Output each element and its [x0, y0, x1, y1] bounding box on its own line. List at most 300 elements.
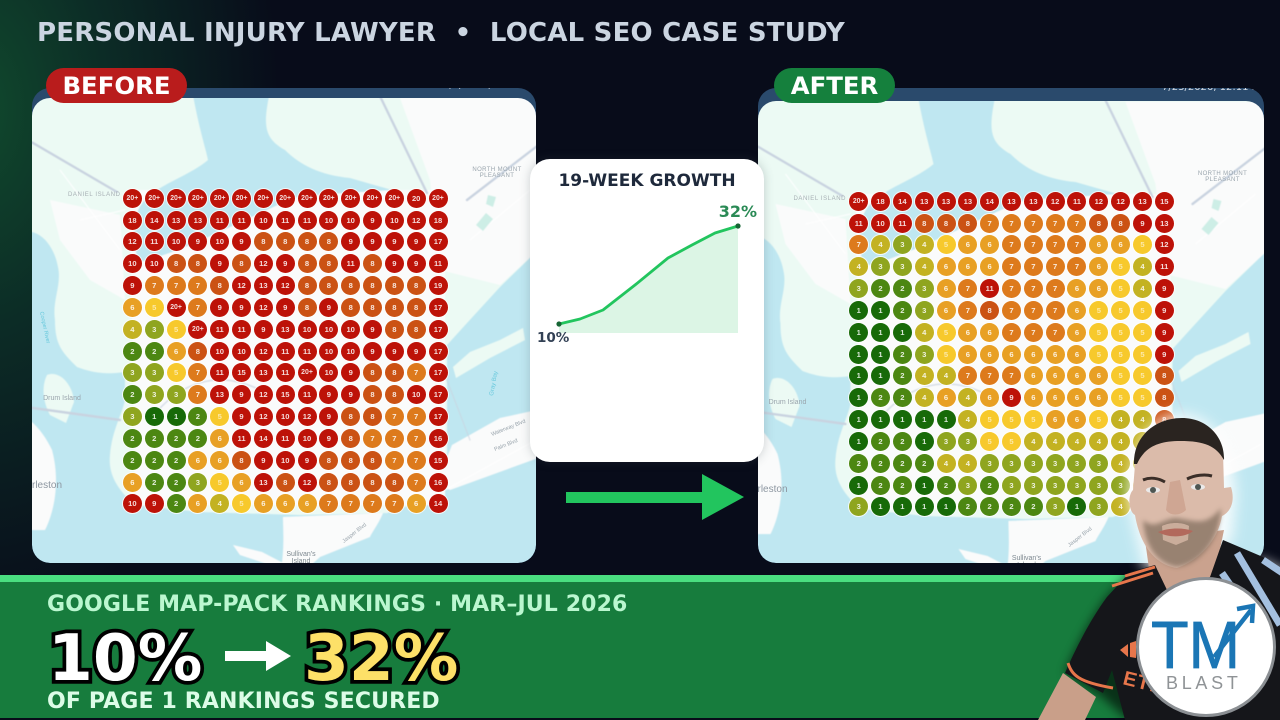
- ranking grid: before: 5: [174, 368, 178, 377]
- map: after: Drum Island: [769, 399, 806, 406]
- ranking grid: after: 5: [1097, 328, 1101, 337]
- ranking grid: before: 10: [259, 216, 268, 225]
- ranking grid: before: 9: [370, 216, 375, 225]
- ranking grid: after: 5: [1009, 437, 1014, 446]
- ranking grid: after: 8: [1162, 393, 1166, 402]
- ranking grid: after: 2: [900, 459, 904, 468]
- ranking grid: after: 4: [857, 262, 861, 271]
- ranking grid: after: 5: [1119, 350, 1123, 359]
- ranking grid: before: 5: [218, 478, 222, 487]
- ranking grid: before: 20+: [323, 195, 335, 202]
- ranking grid: after: 11: [986, 284, 994, 293]
- ranking grid: after: 2: [878, 393, 883, 402]
- ranking grid: before: 8: [283, 237, 287, 246]
- ranking grid: before: 7: [414, 368, 418, 377]
- ranking grid: before: 7: [414, 412, 418, 421]
- ranking grid: after: 7: [966, 371, 970, 380]
- ranking grid: before: 20+: [367, 195, 378, 202]
- ranking grid: before: 12: [303, 478, 311, 487]
- ranking grid: before: 5: [218, 412, 222, 421]
- ranking grid: after: 7: [988, 371, 992, 380]
- ranking grid: after: [848, 191, 1175, 517]
- ranking grid: after: 4: [944, 371, 948, 380]
- ranking grid: before: 20+: [279, 195, 291, 202]
- ranking grid: after: 4: [1140, 502, 1145, 511]
- ranking grid: before: 12: [259, 390, 268, 399]
- ranking grid: after: 2: [900, 350, 904, 359]
- ranking grid: before: 17: [434, 412, 442, 421]
- ranking grid: before: 8: [414, 281, 418, 290]
- ranking grid: before: 20+: [170, 195, 182, 202]
- ranking grid: before: 2: [196, 412, 200, 421]
- ranking grid: after: 7: [1162, 437, 1166, 446]
- ranking grid: after: 2: [878, 284, 883, 293]
- ranking grid: after: 6: [1031, 371, 1035, 380]
- ranking grid: after: 7: [1053, 219, 1057, 228]
- ranking grid: before: 15: [434, 456, 442, 465]
- ranking grid: before: 8: [305, 259, 309, 268]
- ranking grid: before: 13: [281, 325, 289, 334]
- ranking grid: before: 10: [215, 237, 224, 246]
- ranking grid: before: 11: [303, 347, 311, 356]
- ranking grid: after: 8: [1162, 371, 1166, 380]
- map: before: PLEASANT: [480, 173, 514, 179]
- ranking grid: after: 6: [1162, 502, 1166, 511]
- ranking grid: after: 3: [944, 437, 948, 446]
- ranking grid: after: 6: [1053, 350, 1057, 359]
- ranking grid: after: 1: [878, 350, 883, 359]
- ranking grid: before: 9: [370, 237, 375, 246]
- title: PERSONAL INJURY LAWYER • LOCAL SEO CASE STUDY: [37, 18, 845, 48]
- ranking grid: before: 20: [412, 194, 420, 203]
- ranking grid: after: 1: [857, 306, 861, 315]
- ranking grid: after: 6: [988, 240, 992, 249]
- ranking grid: after: 3: [1097, 459, 1101, 468]
- ranking grid: before: 8: [305, 237, 309, 246]
- ranking grid: after: 3: [878, 262, 883, 271]
- ranking grid: before: 10: [128, 499, 137, 508]
- ranking grid: after: 7: [988, 219, 992, 228]
- map: before: DANIEL ISLAND: [68, 192, 121, 198]
- ranking grid: before: 11: [281, 434, 289, 443]
- ranking grid: before: 12: [259, 347, 268, 356]
- ranking grid: after: 1: [922, 481, 926, 490]
- ranking grid: before: 8: [349, 478, 353, 487]
- ranking grid: after: 6: [1053, 415, 1057, 424]
- ranking grid: after: 6: [1075, 350, 1079, 359]
- ranking grid: after: 12: [1095, 197, 1103, 206]
- ranking grid: before: 3: [152, 368, 156, 377]
- ranking grid: after: 14: [898, 197, 907, 206]
- line chart: 32%: [719, 202, 757, 221]
- ranking grid: before: [122, 188, 449, 514]
- ranking grid: before: 11: [303, 216, 311, 225]
- ranking grid: after: 7: [1075, 219, 1079, 228]
- ranking grid: before: 9: [392, 259, 396, 268]
- panel: growth chart card: [530, 159, 764, 462]
- ranking grid: before: 14: [434, 499, 442, 508]
- ranking grid: before: 6: [305, 499, 309, 508]
- ranking grid: before: 8: [305, 281, 309, 290]
- ranking grid: after: 1: [857, 393, 861, 402]
- ranking grid: after: 13: [1160, 219, 1169, 228]
- map: before: Sullivan's: [286, 551, 316, 558]
- ranking grid: after: 1: [922, 502, 926, 511]
- ranking grid: before: 8: [392, 325, 396, 334]
- ranking grid: before: 9: [327, 412, 331, 421]
- ranking grid: after: 1: [878, 371, 883, 380]
- ranking grid: before: 8: [349, 303, 353, 312]
- ranking grid: before: 7: [414, 434, 418, 443]
- ranking grid: before: 8: [327, 259, 331, 268]
- ranking grid: before: 2: [130, 347, 135, 356]
- ranking grid: before: 12: [303, 412, 311, 421]
- ranking grid: before: 9: [370, 325, 375, 334]
- ranking grid: before: 8: [218, 281, 222, 290]
- ranking grid: after: 6: [966, 328, 970, 337]
- ranking grid: after: 1: [857, 350, 861, 359]
- ranking grid: before: 9: [218, 303, 222, 312]
- ranking grid: after: 7: [1009, 262, 1014, 271]
- banner caption: OF PAGE 1 RANKINGS SECURED: [47, 689, 440, 714]
- map: before: Waterway Blvd: [491, 419, 527, 438]
- ranking grid: after: 1: [900, 415, 904, 424]
- ranking grid: after: 2: [878, 459, 883, 468]
- ranking grid: after: 5: [1031, 415, 1035, 424]
- ranking grid: after: 5: [1119, 306, 1123, 315]
- ranking grid: after: 5: [944, 240, 948, 249]
- ranking grid: before: 4: [218, 499, 222, 508]
- ranking grid: before: 11: [281, 347, 289, 356]
- ranking grid: after: 8: [944, 219, 948, 228]
- ranking grid: after: 3: [900, 240, 904, 249]
- ranking grid: after: 3: [1053, 502, 1057, 511]
- ranking grid: after: 7: [1009, 306, 1014, 315]
- arrow: before to after: [566, 474, 744, 520]
- ranking grid: after: 7: [1053, 262, 1057, 271]
- ranking grid: after: 5: [1140, 371, 1145, 380]
- ranking grid: before: 9: [392, 347, 396, 356]
- ranking grid: after: 7: [1075, 240, 1079, 249]
- ranking grid: before: 9: [130, 281, 135, 290]
- ranking grid: after: 3: [922, 284, 926, 293]
- ranking grid: before: 9: [261, 325, 265, 334]
- ranking grid: before: 7: [152, 281, 156, 290]
- ranking grid: after: 9: [1162, 284, 1166, 293]
- ranking grid: before: 8: [349, 412, 353, 421]
- ranking grid: after: 2: [988, 502, 992, 511]
- ranking grid: before: 20+: [388, 195, 400, 202]
- ranking grid: after: 6: [988, 328, 992, 337]
- ranking grid: after: 4: [1075, 437, 1079, 446]
- ranking grid: after: 2: [900, 393, 904, 402]
- ranking grid: after: 8: [1097, 219, 1101, 228]
- ranking grid: before: 20+: [258, 195, 269, 202]
- ranking grid: before: 12: [259, 412, 268, 421]
- ranking grid: after: 5: [1119, 328, 1123, 337]
- ranking grid: before: 9: [327, 390, 331, 399]
- ranking grid: after: 6: [944, 262, 948, 271]
- ranking grid: after: 3: [1075, 459, 1079, 468]
- ranking grid: before: 6: [218, 434, 222, 443]
- ranking grid: before: 9: [370, 347, 375, 356]
- ranking grid: before: 8: [370, 259, 375, 268]
- ranking grid: before: 8: [414, 325, 418, 334]
- ranking grid: after: 13: [942, 197, 950, 206]
- ranking grid: after: 2: [900, 481, 904, 490]
- stat: 32% end value: 32%: [304, 621, 458, 696]
- ranking grid: after: 6: [1075, 284, 1079, 293]
- ranking grid: before: 7: [196, 281, 200, 290]
- ranking grid: before: 8: [370, 368, 375, 377]
- ranking grid: before: 1: [174, 412, 178, 421]
- ranking grid: after: 1: [857, 437, 861, 446]
- ranking grid: before: 11: [216, 325, 224, 334]
- ranking grid: before: 7: [414, 478, 418, 487]
- ranking grid: after: 7: [1075, 262, 1079, 271]
- ranking grid: before: 11: [238, 216, 246, 225]
- ranking grid: before: 7: [392, 456, 396, 465]
- ranking grid: after: 7: [1031, 328, 1035, 337]
- ranking grid: before: 7: [392, 434, 396, 443]
- ranking grid: after: 9: [1162, 328, 1166, 337]
- ranking grid: after: 7: [1162, 459, 1166, 468]
- ranking grid: before: 2: [174, 478, 178, 487]
- ranking grid: before: 5: [174, 325, 178, 334]
- ranking grid: before: 20+: [301, 369, 313, 376]
- ranking grid: before: 8: [370, 390, 375, 399]
- ranking grid: before: 3: [130, 412, 135, 421]
- ranking grid: before: 9: [239, 412, 244, 421]
- ranking grid: before: 10: [325, 347, 333, 356]
- ranking grid: after: 2: [966, 502, 970, 511]
- ranking grid: before: 8: [370, 478, 375, 487]
- ranking grid: after: 3: [1009, 481, 1014, 490]
- ranking grid: after: 5: [1119, 371, 1123, 380]
- ranking grid: before: 9: [327, 303, 331, 312]
- ranking grid: after: 6: [1075, 393, 1079, 402]
- ranking grid: before: 5: [152, 303, 156, 312]
- ranking grid: after: 1: [900, 502, 904, 511]
- ranking grid: before: 15: [281, 390, 289, 399]
- ranking grid: after: 4: [966, 459, 970, 468]
- ranking grid: after: 5: [1140, 350, 1145, 359]
- ranking grid: after: 4: [1140, 459, 1145, 468]
- ranking grid: before: 11: [347, 259, 355, 268]
- ranking grid: before: 11: [303, 390, 311, 399]
- ranking grid: after: 2: [900, 306, 904, 315]
- ranking grid: before: 10: [281, 412, 289, 421]
- ranking grid: before: 8: [196, 347, 200, 356]
- ranking grid: before: 14: [150, 216, 158, 225]
- ranking grid: after: 3: [1031, 459, 1035, 468]
- ranking grid: before: 10: [303, 434, 311, 443]
- ranking grid: after: 4: [922, 240, 926, 249]
- ranking grid: after: 4: [1140, 284, 1145, 293]
- ranking grid: before: 11: [434, 259, 442, 268]
- map: after: Jasper Blvd: [1067, 526, 1093, 549]
- ranking grid: after: 1: [878, 306, 883, 315]
- ranking grid: before: 10: [150, 259, 158, 268]
- ranking grid: after: 6: [1053, 371, 1057, 380]
- ranking grid: after: 4: [922, 393, 926, 402]
- badge: after: AFTER: [791, 71, 878, 100]
- ranking grid: before: 9: [414, 237, 418, 246]
- ranking grid: before: 10: [346, 347, 355, 356]
- ranking grid: before: 16: [434, 478, 442, 487]
- ranking grid: before: 7: [370, 434, 375, 443]
- ranking grid: before: 2: [130, 390, 135, 399]
- arrow: stat arrow: [225, 641, 291, 671]
- ranking grid: before: 9: [283, 259, 287, 268]
- map: before: Cooper River: [38, 311, 51, 344]
- ranking grid: after: 13: [920, 197, 928, 206]
- chart heading: 19-WEEK GROWTH: [558, 171, 736, 191]
- ranking grid: after: 3: [1097, 502, 1101, 511]
- ranking grid: after: 7: [1009, 284, 1014, 293]
- ranking grid: before: 10: [390, 216, 399, 225]
- ranking grid: before: 8: [414, 303, 418, 312]
- ranking grid: before: 7: [414, 456, 418, 465]
- ranking grid: before: 17: [434, 347, 442, 356]
- ranking grid: before: 5: [239, 499, 244, 508]
- ranking grid: before: 13: [194, 216, 202, 225]
- ranking grid: before: 8: [349, 434, 353, 443]
- ranking grid: before: 20+: [432, 195, 444, 202]
- ranking grid: after: 6: [944, 306, 948, 315]
- ranking grid: after: 6: [1009, 350, 1014, 359]
- ranking grid: before: 6: [218, 456, 222, 465]
- ranking grid: after: 5: [1140, 306, 1145, 315]
- ranking grid: before: 10: [237, 347, 246, 356]
- ranking grid: before: 8: [392, 390, 396, 399]
- ranking grid: before: 7: [370, 499, 375, 508]
- badge: before: [46, 68, 187, 103]
- ranking grid: after: 1: [857, 328, 861, 337]
- ranking grid: before: 20+: [236, 195, 247, 202]
- ranking grid: after: 13: [1138, 197, 1147, 206]
- line chart: 10%: [537, 330, 570, 346]
- ranking grid: before: 12: [412, 216, 420, 225]
- ranking grid: after: 7: [1031, 240, 1035, 249]
- ranking grid: after: 7: [1009, 328, 1014, 337]
- ranking grid: before: 9: [349, 237, 353, 246]
- ranking grid: after: 5: [1119, 262, 1123, 271]
- ranking grid: before: 17: [434, 390, 442, 399]
- ranking grid: before: 7: [392, 499, 396, 508]
- ranking grid: before: 9: [239, 237, 244, 246]
- ranking grid: before: 8: [392, 368, 396, 377]
- ranking grid: before: 7: [349, 499, 353, 508]
- ranking grid: after: 7: [1031, 262, 1035, 271]
- ranking grid: before: 2: [152, 434, 156, 443]
- ranking grid: after: 2: [878, 481, 883, 490]
- ranking grid: after: 3: [1053, 459, 1057, 468]
- ranking grid: after: 7: [857, 240, 861, 249]
- ranking grid: before: 9: [283, 303, 287, 312]
- ranking grid: after: 11: [898, 219, 906, 228]
- ranking grid: before: 20+: [192, 326, 204, 333]
- ranking grid: after: 14: [985, 197, 994, 206]
- ranking grid: before: 10: [325, 325, 333, 334]
- ranking grid: before: 9: [239, 390, 244, 399]
- map: after: NORTH MOUNT: [1198, 171, 1247, 177]
- panel: before map: [32, 88, 536, 563]
- ranking grid: before: 7: [196, 303, 200, 312]
- ranking grid: after: 4: [1053, 437, 1057, 446]
- ranking grid: after: 7: [966, 306, 970, 315]
- ranking grid: before: 12: [128, 237, 137, 246]
- ranking grid: before: 8: [370, 456, 375, 465]
- ranking grid: before: 18: [434, 216, 442, 225]
- ranking grid: after: 4: [1119, 459, 1123, 468]
- map: before: Drum Island: [43, 395, 81, 402]
- logo: TM Blast: TM: [1151, 608, 1240, 683]
- panel: after map: [758, 88, 1264, 563]
- ranking grid: after: 2: [988, 481, 992, 490]
- ranking grid: after: 1: [1075, 502, 1079, 511]
- ranking grid: after: 6: [1075, 328, 1079, 337]
- ranking grid: before: 18: [128, 216, 137, 225]
- ranking grid: before: 12: [259, 259, 268, 268]
- ranking grid: before: 2: [174, 456, 178, 465]
- ranking grid: after: 18: [876, 197, 885, 206]
- map: before: [32, 98, 536, 563]
- ranking grid: after: 4: [1119, 415, 1123, 424]
- ranking grid: after: 1: [922, 415, 926, 424]
- ranking grid: after: 5: [1119, 284, 1123, 293]
- ranking grid: before: 2: [174, 499, 178, 508]
- ranking grid: after: 4: [1031, 437, 1035, 446]
- map: after: DANIEL ISLAND: [794, 196, 846, 202]
- ranking grid: before: 10: [325, 368, 333, 377]
- ranking grid: after: 2: [1009, 502, 1014, 511]
- ranking grid: before: 20+: [345, 195, 357, 202]
- ranking grid: before: 6: [239, 478, 244, 487]
- ranking grid: before: 10: [215, 347, 224, 356]
- ranking grid: after: 7: [1053, 306, 1057, 315]
- ranking grid: after: 13: [1007, 197, 1016, 206]
- map: before: Gray Bay: [489, 371, 499, 396]
- ranking grid: after: 5: [1140, 240, 1145, 249]
- ranking grid: before: 2: [196, 434, 200, 443]
- ranking grid: after: 1: [900, 328, 904, 337]
- ranking grid: after: 2: [1031, 502, 1035, 511]
- ranking grid: after: 2: [944, 481, 948, 490]
- map: after: [758, 101, 1264, 563]
- ranking grid: before: 1: [152, 412, 156, 421]
- ranking grid: after: 6: [944, 393, 948, 402]
- ranking grid: after: 4: [922, 371, 926, 380]
- ranking grid: before: 8: [392, 303, 396, 312]
- ranking grid: after: 12: [1116, 197, 1125, 206]
- ranking grid: before: 9: [414, 347, 418, 356]
- ranking grid: after: 6: [966, 350, 970, 359]
- ranking grid: after: 2: [900, 284, 904, 293]
- map: before: Palm Blvd: [494, 438, 519, 453]
- ranking grid: before: 8: [370, 303, 375, 312]
- ranking grid: after: 11: [1160, 262, 1168, 271]
- ranking grid: after: 4: [1140, 481, 1145, 490]
- ranking grid: after: 3: [922, 350, 926, 359]
- ranking grid: after: 12: [1051, 197, 1059, 206]
- ranking grid: after: 5: [1097, 415, 1101, 424]
- ranking grid: before: 8: [174, 259, 178, 268]
- ranking grid: after: 1: [944, 415, 948, 424]
- ranking grid: after: 6: [1097, 284, 1101, 293]
- ranking grid: after: 4: [1119, 437, 1123, 446]
- ranking grid: after: 6: [944, 284, 948, 293]
